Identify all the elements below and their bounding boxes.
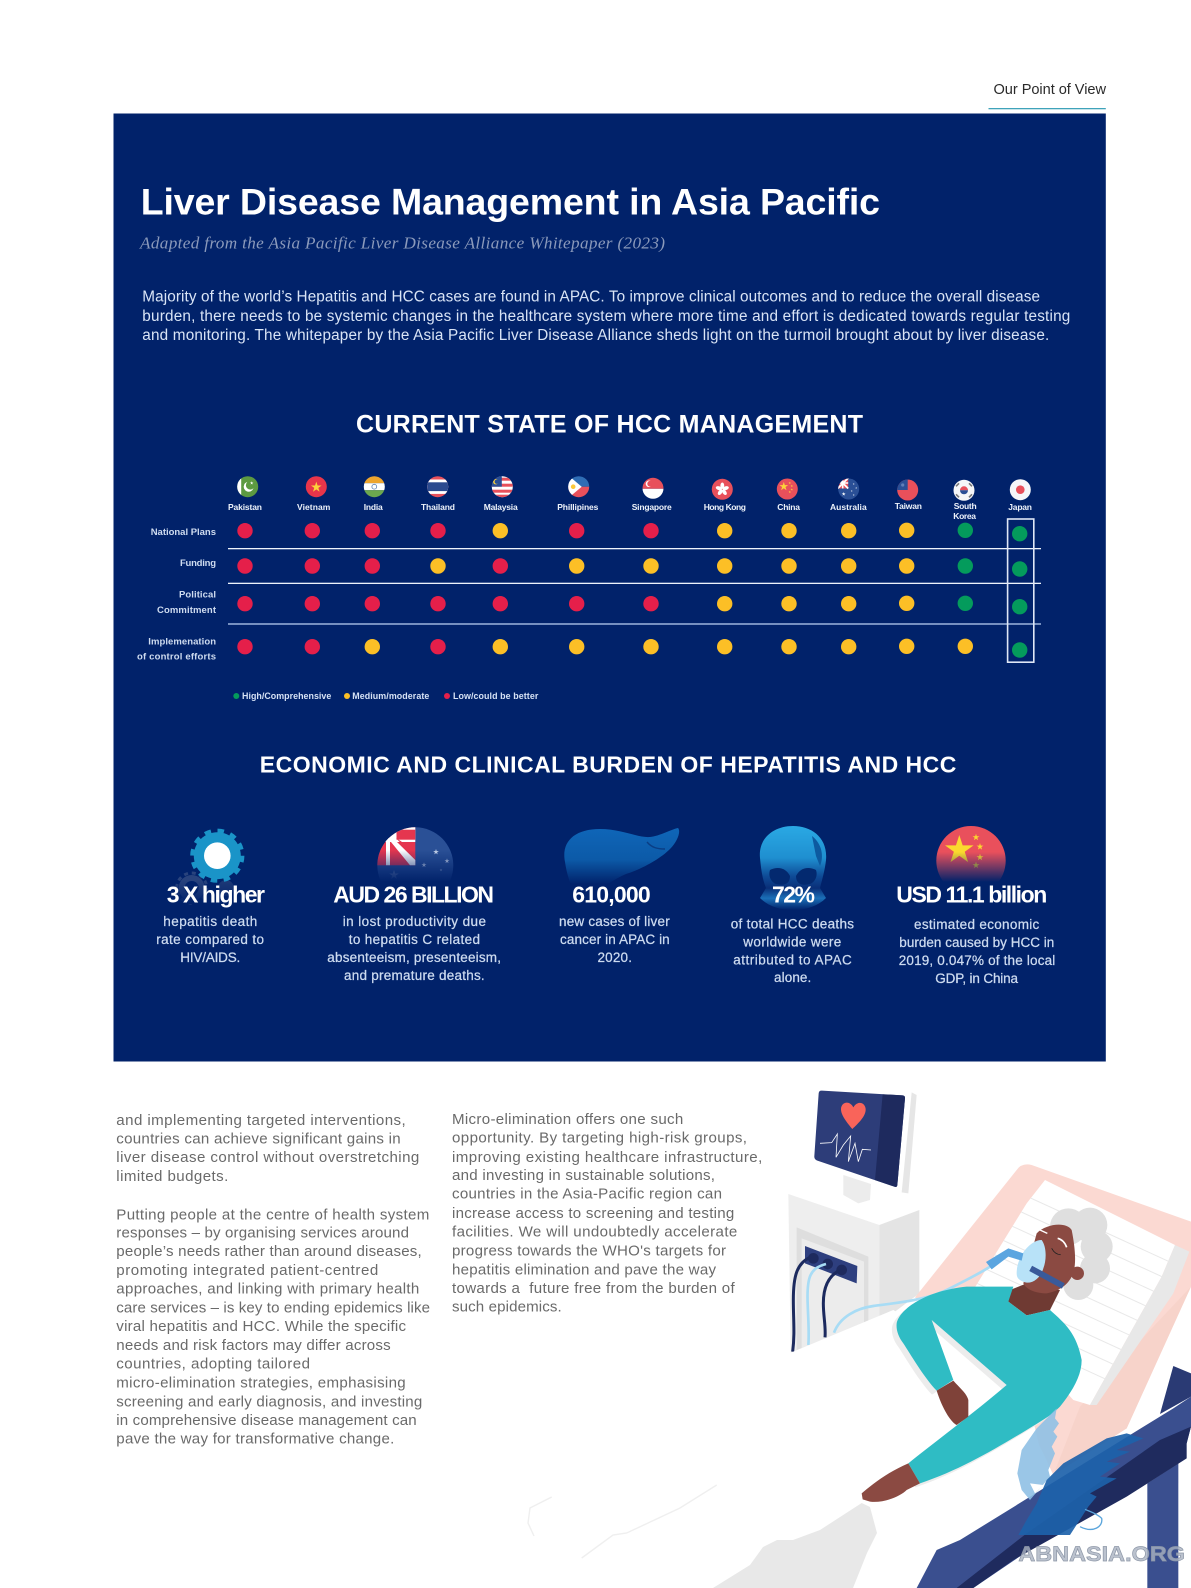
intro paragraph: burden, there needs to be systemic changes in the healthcare system where more time and effort is dedicated towards regular testing [142,308,1070,325]
stat: 610,000: new cases of liver [559,914,670,929]
icon: flag Singapore [642,477,664,500]
text block: left column: limited budgets. [116,1168,228,1185]
text block: left column: countries, adopting tailored [116,1356,310,1373]
stat: USD 11.1 billion: estimated economic [914,917,1040,932]
row divider lines [228,548,1041,625]
row labels: National Plans [151,527,216,538]
icon: Australian flag [377,827,454,878]
country labels: Australia [830,502,867,512]
illustration: blanket folds and leg shadow [528,1485,877,1588]
text block: left column: and implementing targeted interventions, [116,1112,406,1129]
illustration: patient on ventilator in hospital bed [760,1091,1191,1588]
row labels [137,527,217,663]
text block: right column: countries in the Asia-Pacific region can [452,1186,722,1203]
text block: left column: Putting people at the centre of health system [116,1206,429,1223]
text block: left column [116,1112,430,1448]
text block: right column: towards a future free from the burden of [452,1280,735,1297]
patient [862,1208,1113,1502]
country labels [228,501,1032,521]
monitor [814,1091,917,1203]
face [1023,1225,1075,1293]
country labels: Thailand [421,502,455,512]
stat: 3X higher: HIV/AIDS. [180,950,240,965]
text block: right column: such epidemics. [452,1299,562,1316]
text block: left column: promoting integrated patient-centred [116,1262,378,1279]
section header: Our Point of View [988,82,1106,109]
heading: economic and clinical burden: ECONOMIC AND CLINICAL BURDEN OF HEPATITIS AND HCC [260,752,956,778]
row labels: Political [179,590,216,601]
icon: flag Thailand [427,476,449,498]
text block: right column: progress towards the WHO's targets for [452,1243,726,1260]
legend: Low/could be better [453,691,539,701]
icon: flag Australia [838,478,860,500]
text block: left column: countries can achieve significant gains in [116,1130,401,1147]
oxygen mask [1017,1240,1046,1283]
hair [1050,1208,1113,1300]
text block: left column: approaches, and linking with primary health [116,1280,419,1297]
icon: flag Philippines [568,476,590,498]
text block: left column: micro-elimination strategies, emphasising [116,1374,406,1391]
stat: 72%: of total HCC deaths [731,916,854,931]
country labels: Japan [1008,502,1032,512]
text block: right column: hepatitis elimination and pave the way [452,1261,716,1278]
country labels: Korea [953,511,976,521]
legend [233,691,539,701]
row labels: Implemenation [148,636,216,647]
subtitle: Adapted from the Asia Pacific Liver Disease Alliance Whitepaper (2023) [139,233,665,252]
icon: flag Japan [1009,479,1031,501]
text block: left column: people’s needs rather than around diseases, [116,1243,422,1260]
dot matrix: national plans [237,523,1027,541]
icon: skull [760,826,826,910]
stat: 72% [731,826,854,985]
cables [793,1257,810,1352]
row labels: of control efforts [137,652,216,663]
stat: 3X higher: rate compared to [156,932,264,947]
icon: liver [564,828,679,898]
hands [937,1381,968,1425]
icon: flag India [363,476,385,498]
text block: left column: viral hepatitis and HCC. While the specific [116,1318,406,1335]
icon: gears [160,831,250,904]
stat: 72%: alone. [774,970,811,985]
text block: right column: and investing in sustainable solutions, [452,1167,715,1184]
intro paragraph [142,289,1070,344]
stat: USD 11.1 billion [896,825,1055,986]
stat: 72%: attributed to APAC [733,952,852,967]
legend: Medium/moderate [352,691,429,701]
text block: right column [452,1111,762,1316]
text block: left column: in comprehensive disease management can [116,1412,417,1429]
stat: 610,000: 2020. [598,950,632,965]
text block: left column: needs and risk factors may differ across [116,1337,391,1354]
stat: 3X higher: hepatitis death [163,914,257,929]
text block: right column: opportunity. By targeting high-risk groups, [452,1130,747,1147]
teal gown [897,1287,1082,1483]
icon: flag South Korea [953,479,975,501]
stat: USD 11.1 billion: burden caused by HCC in [899,935,1054,950]
dot matrix: funding [237,558,1027,577]
country labels: India [364,502,383,512]
text block: right column: Micro-elimination offers one such [452,1111,683,1128]
text block: right column: improving existing healthcare infrastructure, [452,1149,762,1166]
stat: AUD 26 billion: in lost productivity due [343,914,486,929]
icon: heart [841,1103,866,1129]
dot matrix: political commitment [237,596,1027,614]
text block: right column: increase access to screening and testing [452,1205,734,1222]
stat: USD 11.1 billion: GDP, in China [935,971,1018,986]
watermark: ABNASIA.ORG bird [1017,1408,1185,1566]
text block: left column: screening and early diagnosis, and investing [116,1394,422,1411]
bed backrest pillow [915,1164,1191,1475]
country labels: Hong Kong [704,502,746,512]
country labels: Singapore [632,502,672,512]
text block: left column: care services – is key to ending epidemics like [116,1300,430,1317]
body shadow [892,1291,1055,1487]
country labels: Vietnam [297,502,331,512]
legend: High/Comprehensive [242,691,331,701]
highlight box: Japan [1008,519,1034,662]
icon: flag Taiwan [897,479,919,501]
section header: Our Point of View: Our Point of View [994,82,1106,98]
stat: 610,000: 610,000 [572,881,651,907]
stat: 3X higher [156,831,265,965]
stat: AUD 26 billion: to hepatitis C related [349,932,480,947]
stat: AUD 26 billion [327,827,501,983]
neck [1008,1283,1060,1315]
country labels: South [954,501,977,511]
stat: 72%: 72% [772,881,815,907]
country labels: China [777,502,800,512]
country labels: Malaysia [484,502,518,512]
bed frame [917,1366,1191,1588]
stat: 3X higher: 3 X higher [167,881,265,907]
intro paragraph: Majority of the world’s Hepatitis and HCC cases are found in APAC. To improve clinical outcomes and to reduce the overall disease [142,289,1040,306]
watermark text: ABNASIA.ORG [1018,1542,1185,1566]
icon: flag Pakistan [237,476,259,498]
blanket [760,1310,1047,1588]
stat: USD 11.1 billion: 2019, 0.047% of the local [899,953,1055,968]
icon: flag Malaysia [491,476,513,498]
icon: flag China [776,478,798,500]
panel: liver disease infographic [114,114,1106,1062]
country labels: Taiwan [895,501,922,511]
text block: left column: pave the way for transformative change. [116,1431,394,1448]
ventilator tube [834,1267,990,1333]
stat: USD 11.1 billion: USD 11.1 billion [896,881,1047,907]
row labels: Funding [180,558,216,569]
stat: AUD 26 billion: AUD 26 BILLION [333,881,494,907]
stat: 610,000 [559,828,679,965]
country labels: Phillipines [557,502,599,512]
stat: 72%: worldwide were [742,934,841,949]
stat: AUD 26 billion: absenteeism, presenteeism, [327,950,501,965]
flag row [237,476,1031,501]
row labels: Commitment [157,605,217,616]
heading: current state of HCC management: CURRENT STATE OF HCC MANAGEMENT [356,411,863,439]
icon: flag Hong Kong [711,478,733,500]
title: Liver Disease Management in Asia Pacific [141,181,880,223]
medical machine [788,1194,919,1353]
icon: flag Vietnam [305,476,327,498]
text block: right column: facilities. We will undoubtedly accelerate [452,1224,737,1241]
stat: AUD 26 billion: and premature deaths. [344,968,485,983]
intro paragraph: and monitoring. The whitepaper by the Asia Pacific Liver Disease Alliance sheds light on the turmoil brought about by liver disease. [142,327,1049,344]
text block: left column: responses – by organising services around [116,1224,409,1241]
text block: left column: liver disease control without overstretching [116,1149,419,1166]
dot matrix: implementation of control efforts [237,639,1027,658]
stat: 610,000: cancer in APAC in [560,932,670,947]
country labels: Pakistan [228,502,262,512]
icon: Chinese flag [936,826,1006,881]
